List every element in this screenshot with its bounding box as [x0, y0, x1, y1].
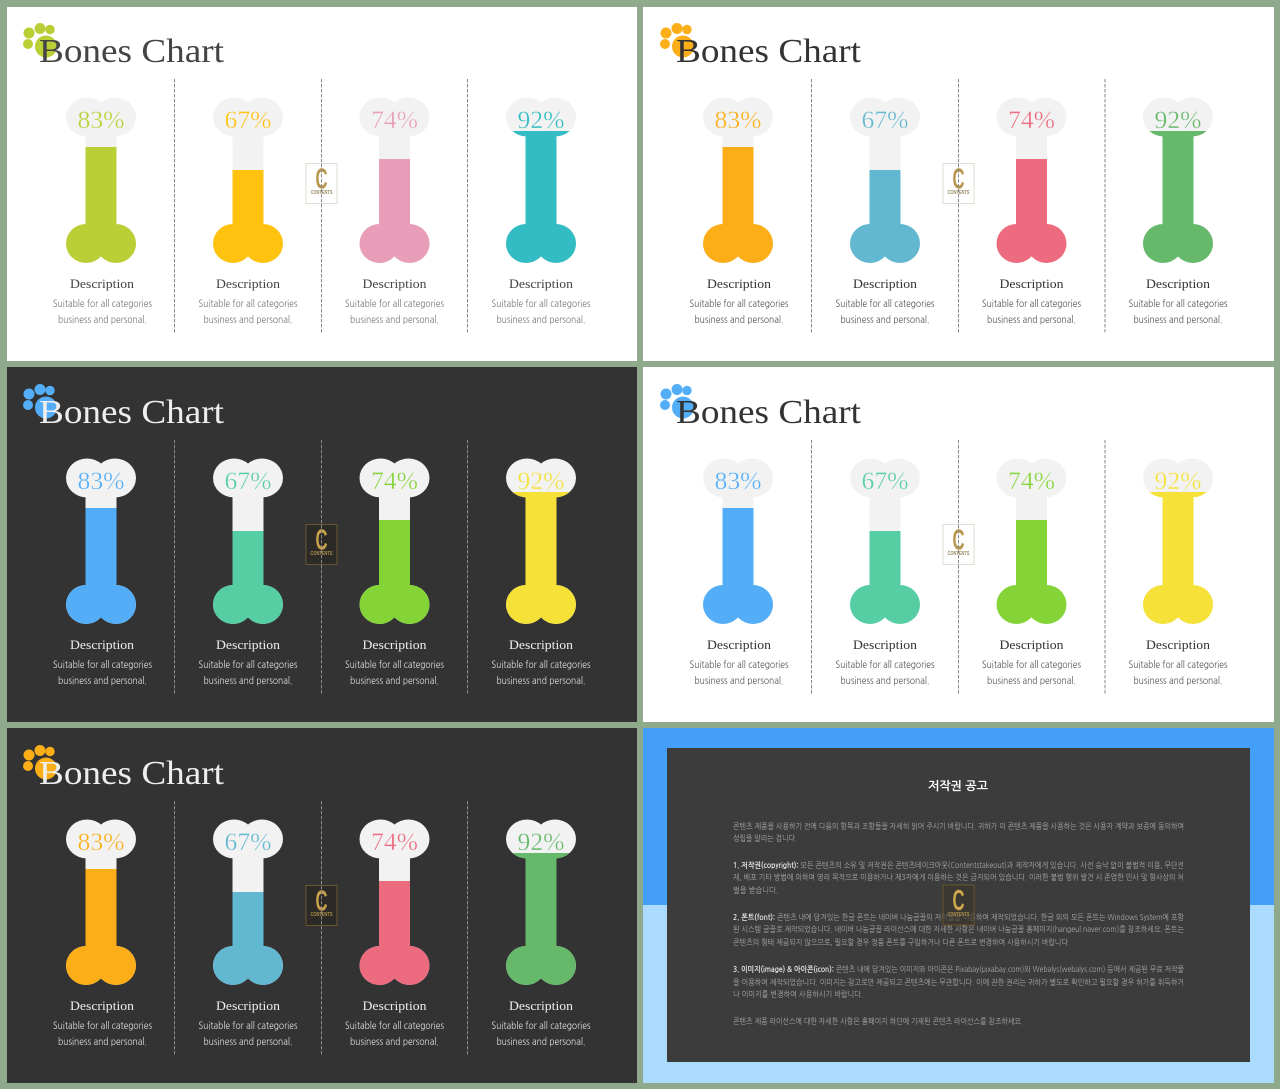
description 2 — [836, 638, 934, 686]
description 2: Suitable for all categories — [836, 661, 934, 670]
bone chart 74% — [996, 458, 1066, 624]
panel: orange-blue-red-green dark slide — [7, 728, 637, 1083]
description 1: Suitable for all categories — [53, 300, 152, 309]
icon: blue paw — [660, 384, 694, 418]
description 3: Suitable for all categories — [345, 661, 444, 670]
text block: section 1 copyright: 1. 저작권(copyright): 모든 콘텐츠의 소유 및 저작권은 콘텐츠테이크아웃(Contentstakeout)과 제작자에게 있습니다. 사전 승낙 없이 불법적 이용, 무단전 — [733, 860, 1184, 870]
text block: section 3 image and icon: 3. 이미지(image) & 아이콘(icon): 콘텐츠 내에 담겨있는 이미지와 아이콘은 Pixabay(pixabay.com)와 Webalys(webalys.com) 등에서 제공된 무료 저작물 — [733, 964, 1184, 974]
text block: section 2 font — [733, 912, 1184, 947]
description 3: Suitable for all categories — [345, 300, 444, 309]
description 3: Description — [362, 277, 427, 291]
description 4: business and personal. — [496, 1038, 586, 1047]
description 1: Description — [70, 277, 135, 291]
logo watermark — [306, 164, 337, 204]
text block: section 3 image and icon — [733, 964, 1184, 999]
description 2: Description — [216, 638, 281, 652]
logo watermark — [943, 164, 974, 204]
description 4: business and personal. — [1134, 677, 1222, 686]
description 1: Suitable for all categories — [690, 300, 788, 309]
description 1: Description — [707, 638, 772, 652]
description 1: business and personal. — [58, 1038, 147, 1047]
description 4 — [492, 999, 590, 1047]
description 3: Description — [362, 999, 427, 1013]
description 4 — [1128, 277, 1228, 325]
text block: section 2 font: 콘텐츠의 형태 제공되지 않으므로, 필요할 경우 정품 폰트를 구입하거나 다른 폰트로 변경하여 사용하시기 바랍니다. — [733, 938, 1070, 947]
description 3 — [982, 638, 1081, 686]
text block: section 1 copyright — [733, 860, 1184, 895]
description 3 — [345, 638, 444, 686]
description 1: Description — [70, 999, 135, 1013]
description 1 — [53, 638, 152, 686]
description 1: Suitable for all categories — [53, 1022, 152, 1031]
description 1: business and personal. — [58, 677, 147, 686]
description 4: Description — [509, 638, 574, 652]
logo watermark: C — [952, 164, 965, 196]
description 2: business and personal. — [204, 677, 292, 686]
description 4: Suitable for all categories — [492, 661, 590, 670]
description 4 — [492, 277, 590, 325]
description 3: business and personal. — [350, 316, 439, 325]
panel: blue-teal-green-yellow dark slide — [7, 367, 637, 722]
description 4 — [492, 638, 590, 686]
description 1: Suitable for all categories — [53, 661, 152, 670]
logo watermark: C — [316, 524, 328, 556]
bone chart 74%: 74% — [1008, 107, 1055, 134]
logo watermark — [943, 524, 974, 564]
description 2: business and personal. — [840, 316, 930, 325]
bone chart 74% — [360, 98, 430, 263]
bone chart 74%: 74% — [1008, 468, 1055, 495]
description 4: Description — [1146, 277, 1211, 291]
description 4: Description — [509, 277, 574, 291]
logo watermark — [306, 524, 337, 564]
bone chart 92%: 92% — [518, 468, 564, 495]
bone chart 67% — [850, 98, 920, 263]
description 4: Description — [1146, 638, 1211, 652]
description 1 — [53, 999, 152, 1047]
bone chart 83%: 83% — [78, 107, 124, 134]
text block: section 2 font: 2. 폰트(font): 콘텐츠 내에 담겨있는 한글 폰트는 네이버 나눔글꼴의 저작물을 이용하여 제작되었습니다. 한글 외의 모든 폰트는 Windows System에 포함 — [733, 912, 1184, 922]
logo watermark: CONTENTS — [948, 912, 970, 918]
description 2: Description — [853, 277, 918, 291]
bone chart 67% — [213, 820, 283, 985]
bone chart 67%: 67% — [224, 829, 272, 856]
description 3: Suitable for all categories — [982, 661, 1081, 670]
bone chart 67% — [213, 98, 283, 263]
description 2: Suitable for all categories — [836, 300, 934, 309]
bone chart 74% — [360, 820, 430, 985]
bone chart 92% — [506, 820, 576, 985]
logo watermark — [306, 886, 337, 926]
description 2 — [198, 277, 298, 325]
description 4: Suitable for all categories — [492, 300, 590, 309]
text block: intro: 콘텐츠 제품을 사용하기 전에 다음의 항목과 조항들을 자세히 읽어 주시기 바랍니다. 귀하가 이 콘텐츠 제품을 사용하는 것은 사용자 계약과 보증에 동의하여 — [733, 822, 1184, 831]
logo watermark: CONTENTS — [948, 190, 970, 196]
bone chart 74% — [996, 98, 1066, 263]
text block: intro — [733, 822, 1184, 843]
title: Bones Chart — [676, 33, 862, 70]
bone chart 92%: 92% — [518, 107, 564, 134]
description 2: Description — [216, 277, 281, 291]
text block: license note: 콘텐츠 제품 라이선스에 대한 자세한 사항은 홈페이지 하단에 기재된 콘텐츠 라이선스를 참조하세요. — [733, 1017, 1023, 1026]
description 2: business and personal. — [840, 677, 930, 686]
logo watermark: C — [316, 886, 328, 918]
bone chart 83% — [66, 98, 136, 263]
logo watermark: C — [316, 164, 328, 196]
description 2: Description — [216, 999, 281, 1013]
description 2 — [198, 638, 298, 686]
bone chart 67%: 67% — [862, 468, 908, 495]
description 3: business and personal. — [987, 316, 1076, 325]
bone chart 92% — [506, 98, 576, 263]
bone chart 74%: 74% — [371, 468, 418, 495]
text block: intro: 성립을 알리는 겁니다. — [733, 834, 797, 843]
description 2: Description — [853, 638, 918, 652]
description 4: business and personal. — [1134, 316, 1222, 325]
description 3: Description — [1000, 638, 1064, 652]
description 2: Suitable for all categories — [198, 661, 298, 670]
bone chart 92% — [506, 458, 576, 624]
bone chart 92%: 92% — [1154, 468, 1202, 495]
logo watermark — [943, 885, 974, 925]
bone chart 74% — [360, 458, 430, 624]
title: Bones Chart — [39, 755, 225, 792]
panel: orange-blue-red-green light slide — [643, 7, 1274, 361]
bone chart 83% — [66, 820, 136, 985]
description 4: business and personal. — [496, 316, 586, 325]
description 4: Suitable for all categories — [1128, 661, 1228, 670]
description 1 — [690, 277, 788, 325]
text block: section 3 image and icon: 을 이용하여 제작되었습니다. 이미지는 참고로만 제공되고 콘텐츠에는 무관합니다. 이에 관한 권리는 귀하가 별도로 확인하고 필요할 경우 허가를 취득하거 — [733, 978, 1184, 987]
icon: green paw — [23, 23, 57, 58]
description 1: Description — [707, 277, 772, 291]
bone chart 83% — [66, 458, 136, 624]
text block: section 3 image and icon: 나 이미지를 변경하여 사용하시기 바랍니다. — [733, 990, 863, 999]
icon: orange paw — [23, 745, 57, 780]
description 3: Suitable for all categories — [345, 1022, 444, 1031]
bone chart 92% — [1143, 98, 1213, 263]
description 3 — [982, 277, 1081, 325]
description 1: business and personal. — [694, 677, 784, 686]
bone chart 67% — [213, 458, 283, 624]
description 2: Suitable for all categories — [198, 300, 298, 309]
description 2 — [836, 277, 934, 325]
description 3 — [345, 277, 444, 325]
panel: copyright notice — [643, 728, 1274, 1083]
description 4: Description — [509, 999, 574, 1013]
bone chart 83%: 83% — [78, 829, 124, 856]
bone chart 83% — [703, 98, 773, 263]
bone chart 83%: 83% — [714, 468, 762, 495]
bone chart 83%: 83% — [714, 107, 762, 134]
logo watermark: CONTENTS — [310, 190, 333, 196]
heading: copyright notice: 저작권 공고 — [928, 779, 989, 792]
description 3: Description — [362, 638, 427, 652]
logo watermark: CONTENTS — [310, 551, 333, 557]
description 1 — [690, 638, 788, 686]
panel: green-yellow-pink-teal light slide — [7, 7, 637, 361]
description 1: Description — [70, 638, 135, 652]
bone chart 92%: 92% — [1154, 107, 1202, 134]
bone chart 67% — [850, 458, 920, 624]
description 3: Description — [1000, 277, 1064, 291]
description 1: business and personal. — [58, 316, 147, 325]
title: Bones Chart — [39, 33, 225, 70]
logo watermark: C — [952, 885, 965, 917]
description 4: Suitable for all categories — [1128, 300, 1228, 309]
bone chart 67%: 67% — [862, 107, 908, 134]
description 1: business and personal. — [694, 316, 784, 325]
description 2: Suitable for all categories — [198, 1022, 298, 1031]
description 3: business and personal. — [350, 1038, 439, 1047]
bone chart 83% — [703, 458, 773, 624]
bone chart 83%: 83% — [78, 468, 124, 495]
description 4: Suitable for all categories — [492, 1022, 590, 1031]
bone chart 74%: 74% — [371, 829, 418, 856]
bone chart 92% — [1143, 458, 1213, 624]
logo watermark: C — [952, 524, 965, 556]
logo watermark: CONTENTS — [948, 551, 970, 557]
description 2: business and personal. — [204, 1038, 292, 1047]
description 4 — [1128, 638, 1228, 686]
bone chart 92%: 92% — [518, 829, 564, 856]
description 1 — [53, 277, 152, 325]
description 1: Suitable for all categories — [690, 661, 788, 670]
description 3: Suitable for all categories — [982, 300, 1081, 309]
text block: section 1 copyright: 벌을 받습니다. — [733, 886, 778, 895]
bone chart 67%: 67% — [224, 468, 272, 495]
bone chart 67%: 67% — [224, 107, 272, 134]
logo watermark: CONTENTS — [310, 912, 333, 918]
title: Bones Chart — [676, 394, 862, 431]
text block: section 2 font: 된 시스템 글꼴로 제작되었습니다. 네이버 나눔글꼴 라이선스에 대한 자세한 사항은 네이버 나눔글꼴 홈페이지(hangeul.naver.com)를 참조하세요. 폰트는 — [733, 924, 1184, 934]
bone chart 74%: 74% — [371, 107, 418, 134]
panel: blue-teal-green-yellow light slide — [643, 367, 1274, 722]
icon: orange paw — [660, 23, 694, 58]
description 2: business and personal. — [204, 316, 292, 325]
icon: blue paw — [23, 384, 57, 418]
description 2 — [198, 999, 298, 1047]
text block: section 1 copyright: 재, 배포 기타 방법에 의하여 영리 목적으로 이용하거나 제3자에게 이용하는 것은 금지되어 있습니다. 이러한 불법 행위 발견 시 준엄한 민사 및 형사상의 처 — [733, 873, 1184, 882]
description 4: business and personal. — [496, 677, 586, 686]
description 3 — [345, 999, 444, 1047]
description 3: business and personal. — [350, 677, 439, 686]
description 3: business and personal. — [987, 677, 1076, 686]
title: Bones Chart — [39, 394, 225, 431]
